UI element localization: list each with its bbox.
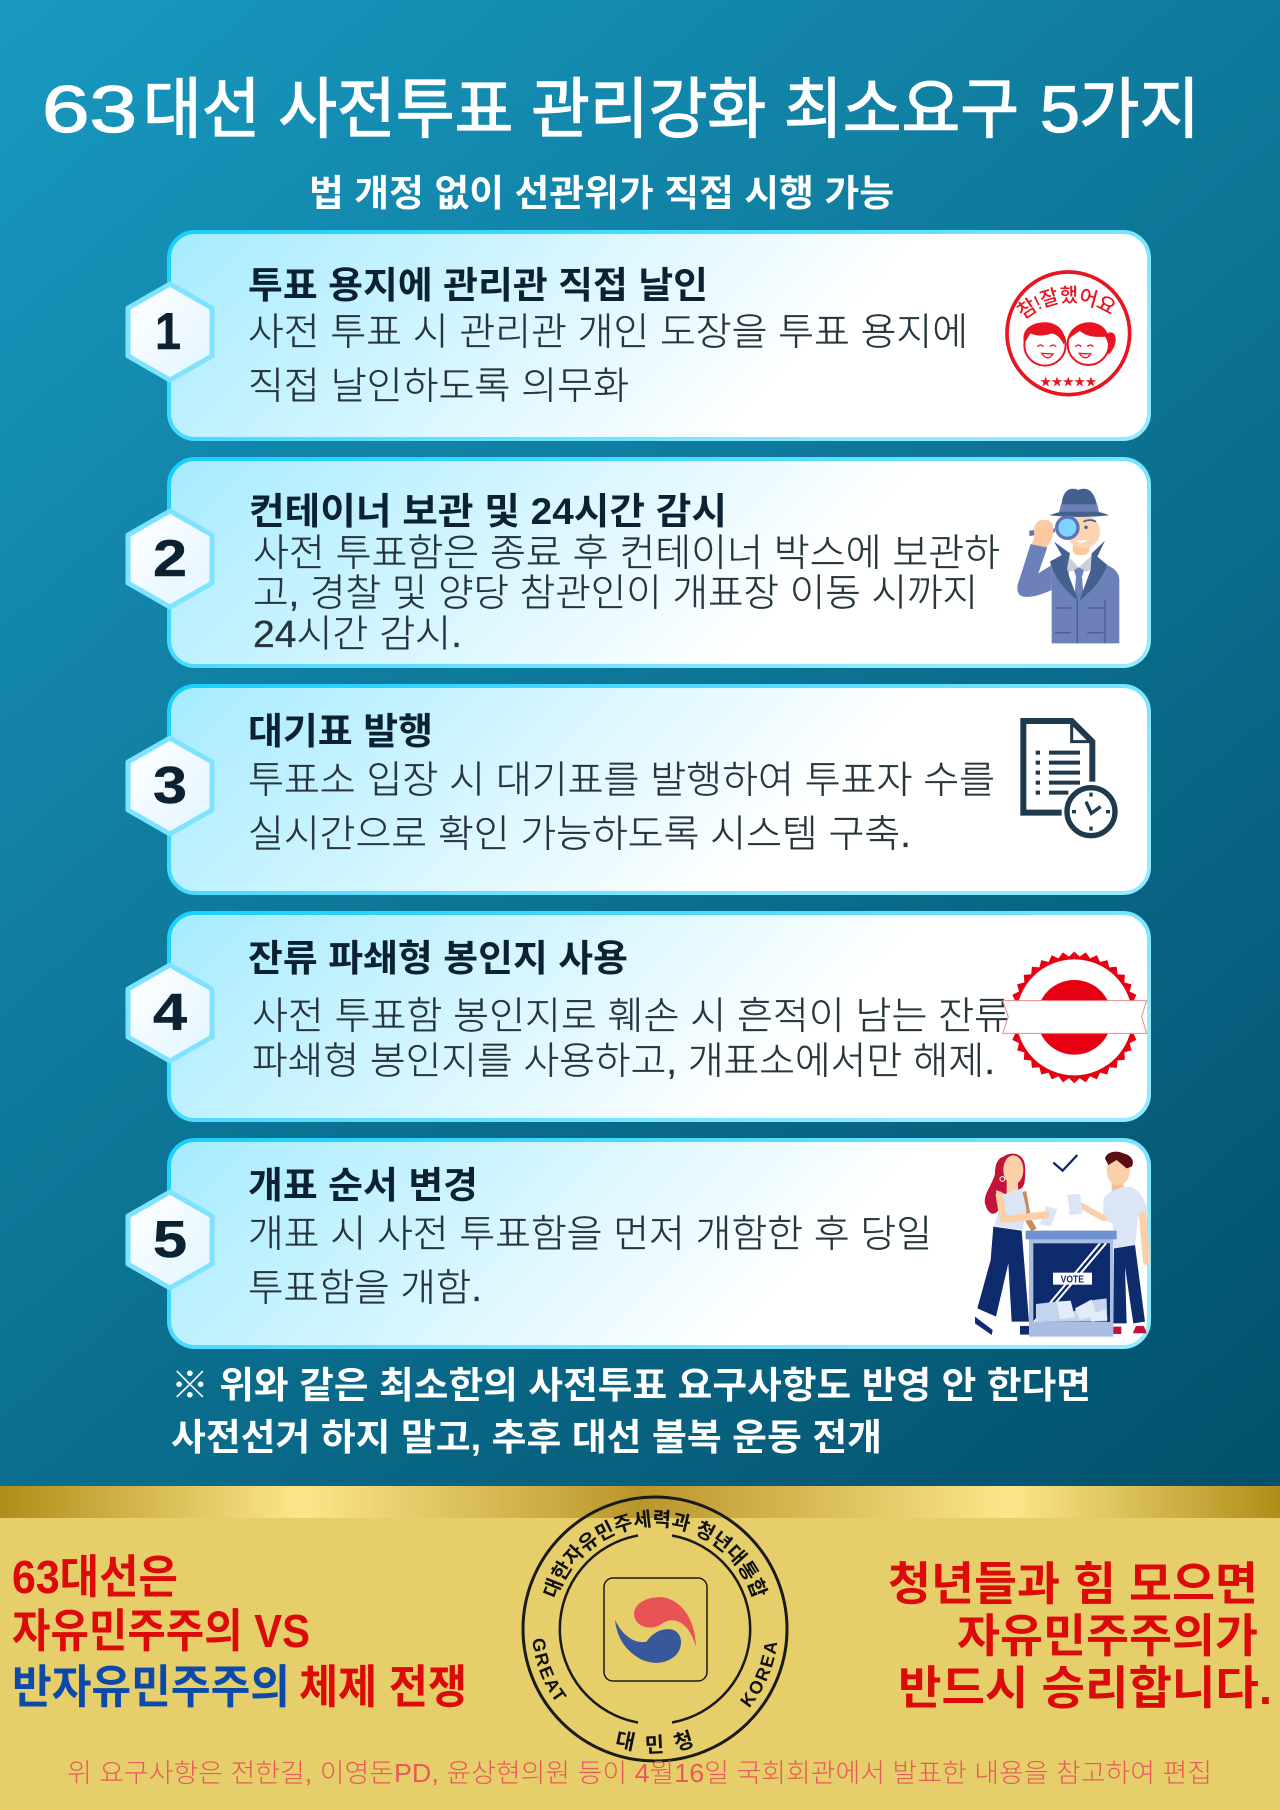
text: step 5 body: 개표 시 사전 투표함을 먼저 개함한 후 당일 [248, 1214, 932, 1256]
panel: step 4 [128, 913, 1149, 1120]
title: 대선 사전투표 관리강화 최소요구 [143, 72, 1019, 146]
seal: Korean emblem: 대민청 [616, 1729, 693, 1754]
text: left slogan: 체제 전쟁 [299, 1661, 467, 1713]
icon: detective with magnifier [1017, 489, 1119, 643]
text: right slogan: 자유민주주의가 [957, 1610, 1258, 1662]
text: step 4 body [252, 996, 1010, 1083]
text: step 2 body: 24시간 감시. [253, 614, 462, 656]
text: step 1 body [248, 312, 968, 408]
text: left slogan: 자유민주주의 VS [12, 1605, 310, 1657]
badge: number 5: 5 [153, 1211, 187, 1269]
badge: number 4 [128, 965, 212, 1061]
note: ※ 위와 같은 최소한의 사전투표 요구사항도 반영 안 한다면 [171, 1355, 1091, 1409]
text: step 5 body: 투표함을 개함. [248, 1268, 482, 1310]
text: step 5 body [248, 1214, 932, 1310]
note [171, 1355, 1091, 1458]
badge: number 5 [128, 1192, 212, 1288]
title: 63 [42, 72, 137, 146]
note: 사전선거 하지 말고, 추후 대선 불복 운동 전개 [171, 1417, 882, 1458]
badge: number 3 [128, 738, 212, 834]
icon: document with clock [1023, 721, 1115, 836]
text: step 1 body: 사전 투표 시 관리관 개인 도장을 투표 용지에 [248, 312, 968, 354]
heading: step 4: 잔류 파쇄형 봉인지 사용 [248, 938, 628, 979]
heading: step 2: 컨테이너 보관 및 24시간 감시 [249, 491, 727, 532]
seal: Korean emblem [522, 1496, 788, 1762]
icon: red seal with ribbon [1003, 951, 1147, 1083]
footnote: 위 요구사항은 전한길, 이영돈PD, 윤상현의원 등이 4월16일 국회회관에서 발표한 내용을 참고하여 편집 [67, 1758, 1212, 1788]
text: right slogan [888, 1558, 1272, 1714]
badge: number 2: 2 [153, 530, 187, 588]
panel: step 3 [128, 686, 1149, 893]
text: step 2 body: 사전 투표함은 종료 후 컨테이너 박스에 보관하 [253, 533, 1000, 575]
icon: red approval stamp: 참!잘했어요 [1016, 286, 1115, 319]
icon: two people voting at ballot box [975, 1152, 1148, 1337]
seal: Korean emblem: GREAT [532, 1638, 567, 1700]
badge: number 1: 1 [155, 303, 181, 361]
badge: number 3: 3 [153, 757, 187, 815]
title: 가지 [1079, 72, 1200, 146]
text: left slogan [12, 1551, 467, 1713]
text: left slogan: 반자유민주주의 [12, 1661, 290, 1713]
text: step 2 body [253, 533, 1000, 656]
title: 5 [1040, 72, 1080, 146]
text: step 3 body: 실시간으로 확인 가능하도록 시스템 구축. [248, 814, 911, 856]
text: left slogan: 63대선은 [12, 1551, 178, 1603]
icon: taegeuk [615, 1597, 696, 1663]
panel: step 1 [126, 230, 1151, 441]
heading: step 3: 대기표 발행 [248, 711, 433, 752]
heading: step 1: 투표 용지에 관리관 직접 날인 [248, 265, 708, 306]
text: step 2 body: 고, 경찰 및 양당 참관인이 개표장 이동 시까지 [253, 573, 978, 615]
badge: number 1 [128, 284, 212, 380]
subtitle: 법 개정 없이 선관위가 직접 시행 가능 [309, 173, 894, 214]
text: step 3 body: 투표소 입장 시 대기표를 발행하여 투표자 수를 [248, 760, 995, 802]
text: step 4 body: 사전 투표함 봉인지로 훼손 시 흔적이 남는 잔류 [252, 996, 1010, 1038]
panel: step 2 [128, 459, 1149, 666]
heading: step 5: 개표 순서 변경 [248, 1165, 478, 1206]
seal: Korean emblem: KOREA [740, 1642, 778, 1708]
text: step 3 body [248, 760, 995, 856]
panel: step 5 [128, 1140, 1149, 1347]
badge: number 4: 4 [153, 984, 187, 1042]
text: step 1 body: 직접 날인하도록 의무화 [248, 366, 629, 408]
text: right slogan: 반드시 승리합니다. [898, 1662, 1272, 1714]
badge: number 2 [128, 511, 212, 607]
text: right slogan: 청년들과 힘 모으면 [888, 1558, 1258, 1610]
panel: gold footer [0, 1486, 1280, 1810]
icon: two people voting at ballot box: VOTE [1061, 1274, 1084, 1285]
seal: Korean emblem: 대한자유민주세력과 청년대통합 [543, 1509, 768, 1598]
gold band [0, 1486, 1280, 1518]
text: step 4 body: 파쇄형 봉인지를 사용하고, 개표소에서만 해제. [252, 1041, 995, 1083]
icon: red approval stamp: ★★★★★ [1040, 377, 1097, 389]
icon: red approval stamp [1005, 270, 1132, 396]
